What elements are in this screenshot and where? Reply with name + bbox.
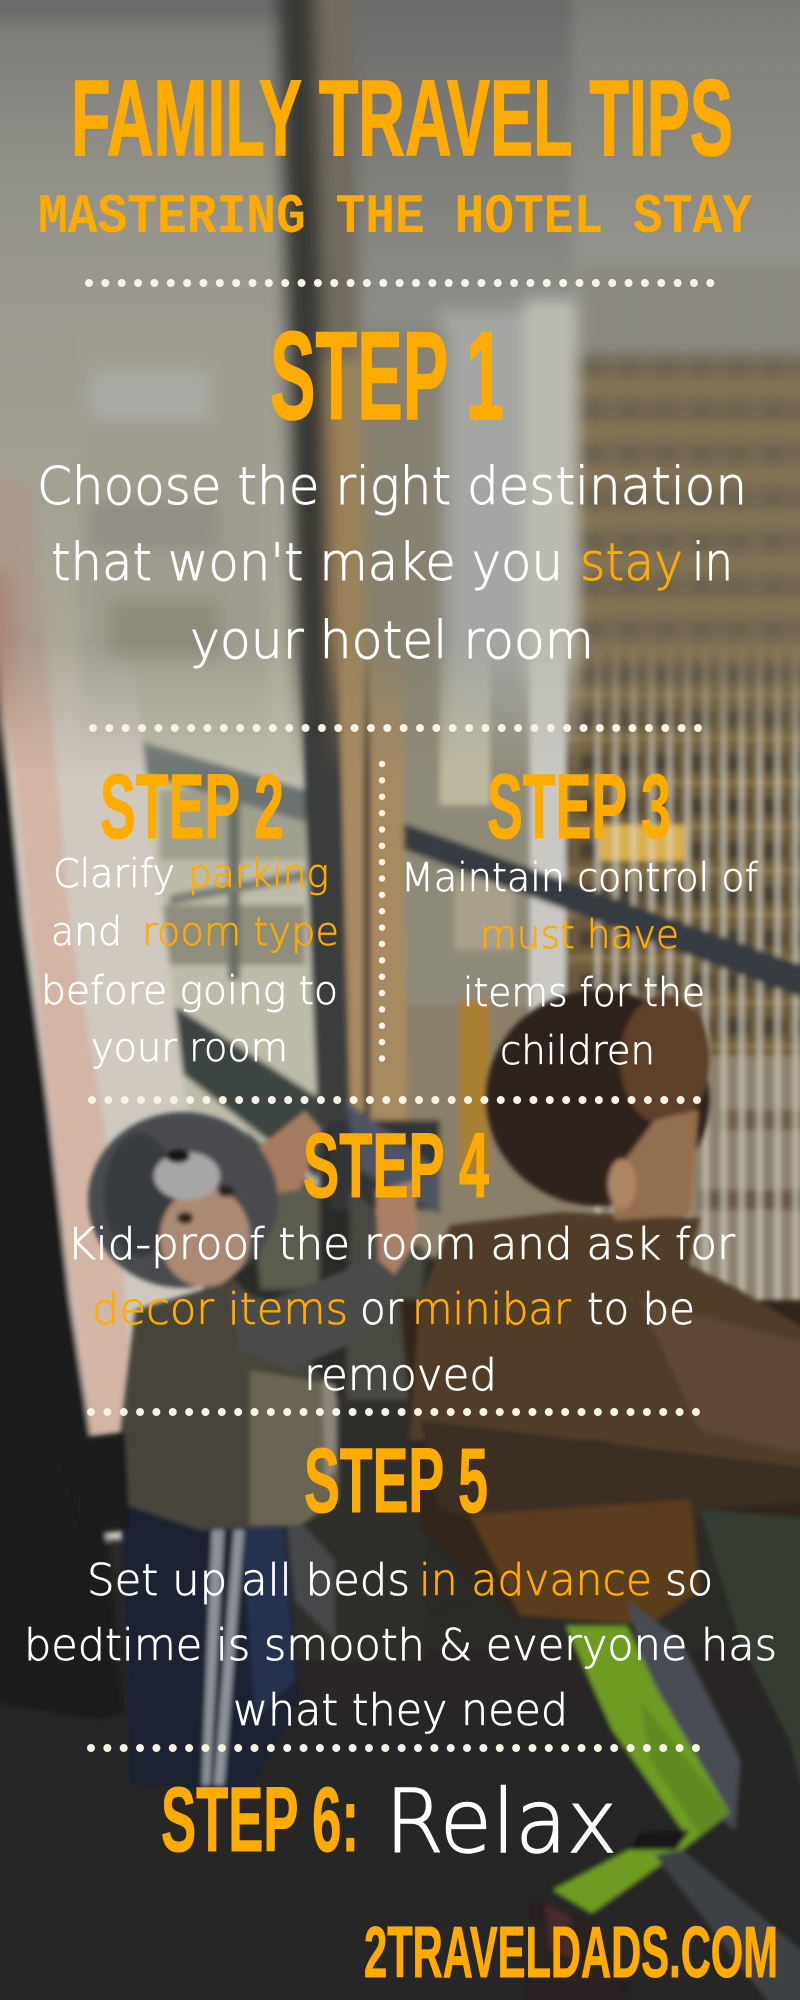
step 5 text: Set up all beds xyxy=(87,1555,410,1606)
panel: step 3 xyxy=(401,756,758,1074)
panel: step 5 xyxy=(24,1430,777,1736)
panel: step 1: that won't make you xyxy=(51,533,563,593)
panel: step 1: your hotel room xyxy=(190,611,594,671)
step 6 heading: STEP 6: xyxy=(161,1769,359,1871)
boy's green band and legs xyxy=(627,1600,740,1830)
blurred upper window scene xyxy=(0,0,800,800)
panel: step 2 xyxy=(41,756,339,1071)
step 3 heading: STEP 3 xyxy=(487,756,671,858)
step 2 heading: STEP 2 xyxy=(100,756,284,858)
panel: step 3: items for the xyxy=(463,971,705,1016)
step 5 heading: STEP 5 xyxy=(304,1430,488,1532)
step 2 text: Clarify xyxy=(53,852,175,897)
panel: step 4: minibar xyxy=(412,1284,572,1335)
panel: step 6 xyxy=(161,1769,617,1873)
panel: step 1: in xyxy=(692,533,733,593)
panel: step 5: in advance xyxy=(419,1555,652,1606)
panel: step 5: so xyxy=(665,1555,713,1606)
panel: step 3: children xyxy=(500,1029,655,1074)
boy xyxy=(400,1300,800,1620)
panel: step 4 xyxy=(67,1115,736,1401)
relax: Relax xyxy=(385,1771,617,1873)
step 4 heading: STEP 4 xyxy=(303,1115,489,1217)
panel: step 2: before going to xyxy=(41,969,338,1014)
panel: step 4: or xyxy=(360,1284,404,1335)
panel: step 4: to be xyxy=(587,1284,695,1335)
children and floor xyxy=(0,990,800,2000)
panel: step 2: and xyxy=(51,910,122,955)
divider between steps 2 and 3 xyxy=(379,764,385,1060)
mid window scene xyxy=(0,640,800,1760)
panel: step 2: room type xyxy=(142,910,339,955)
step 3 text: Maintain control of xyxy=(401,856,758,901)
step 4 text: Kid-proof the room and ask for xyxy=(67,1219,736,1270)
panel: step 2: parking xyxy=(188,852,329,897)
panel: step 5: what they need xyxy=(233,1685,568,1736)
panel: step 1: stay xyxy=(580,533,683,593)
panel: step 4: decor items xyxy=(92,1284,348,1335)
panel: step 3: must have xyxy=(480,913,679,958)
panel: step 1 xyxy=(37,307,747,671)
panel: step 4: removed xyxy=(304,1350,497,1401)
baby xyxy=(120,1480,300,1790)
step 1 heading: STEP 1 xyxy=(270,307,504,446)
panel: step 2: your room xyxy=(91,1026,288,1071)
step 1 text: Choose the right destination xyxy=(37,457,747,517)
panel: step 5: bedtime is smooth & everyone has xyxy=(24,1620,777,1671)
title xyxy=(38,57,752,249)
